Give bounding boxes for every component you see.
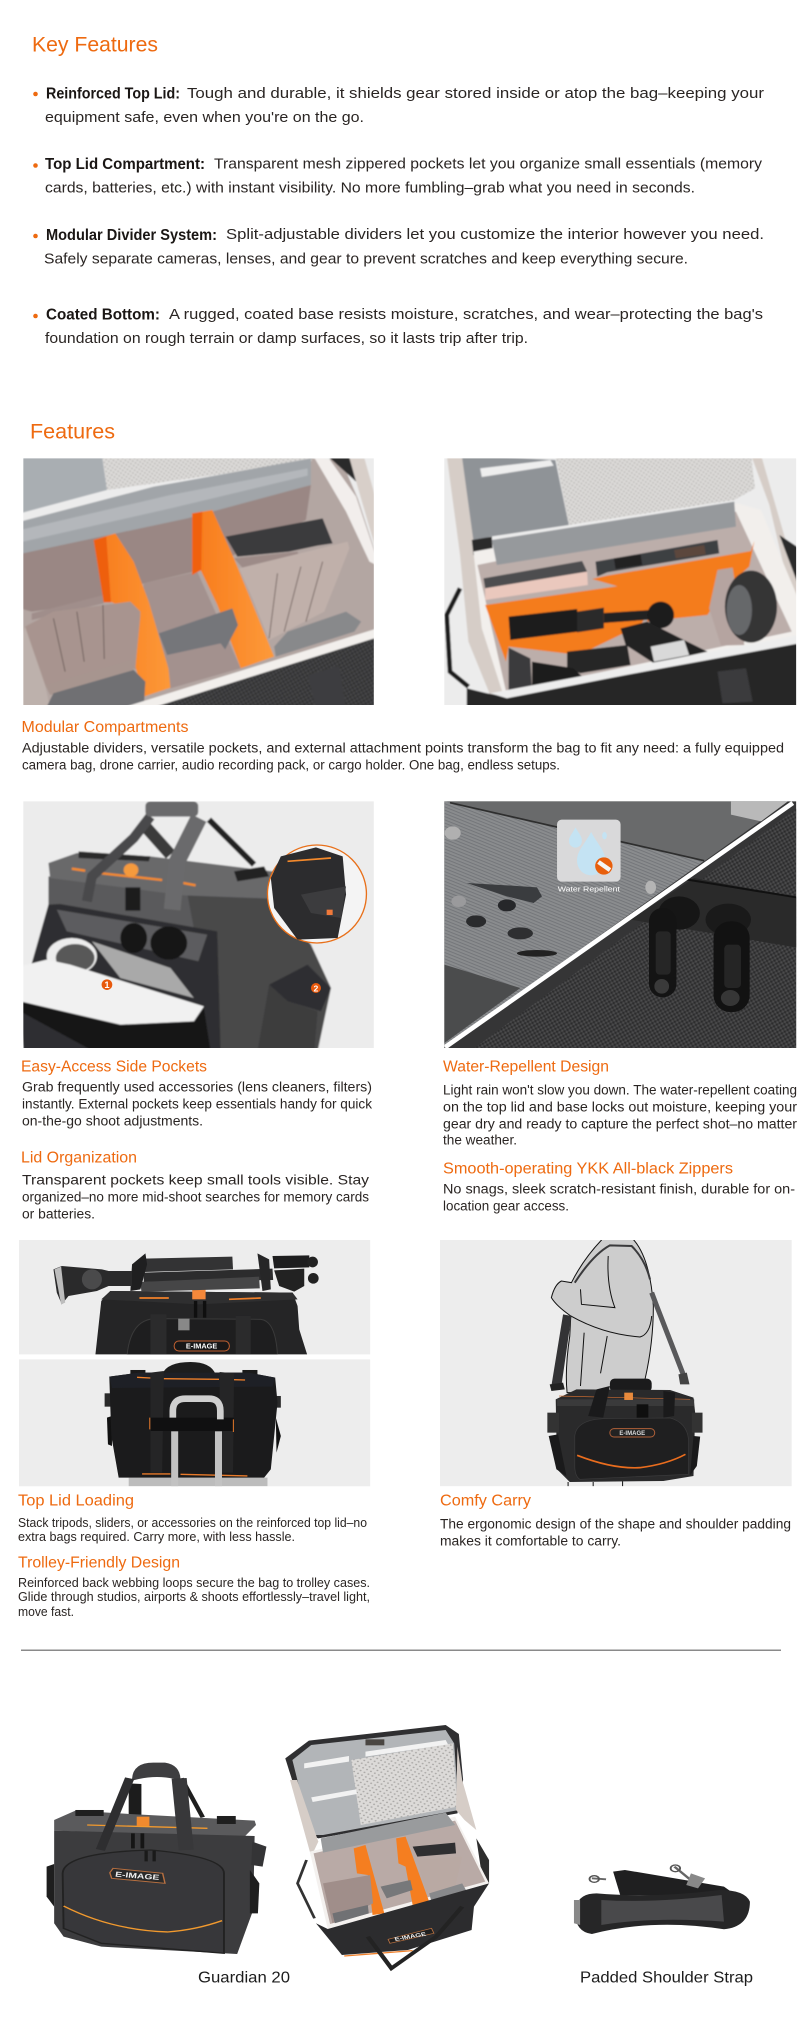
icon: zipper pulls (649, 896, 751, 1012)
text block: water-repellent description: on the top lid and base locks out moisture, keeping your (443, 1100, 798, 1114)
item: Coated Bottom: Coated Bottom: (46, 306, 160, 324)
subheading: Comfy Carry: Comfy Carry (440, 1492, 531, 1510)
text block: top lid loading description (18, 1516, 367, 1544)
item: Reinforced Top Lid (33, 85, 764, 126)
subheading: Lid Organization: Lid Organization (21, 1150, 137, 1166)
heading: Features: Features (30, 420, 115, 444)
text block: Modular Compartments description (22, 740, 784, 772)
photo: tripod on top lid (19, 1240, 370, 1354)
text block: lid organization description: Transparent pockets keep small tools visible. Stay (22, 1172, 369, 1188)
text block: zippers description (443, 1182, 795, 1214)
logo: E-IMAGE: E-IMAGE (394, 1931, 428, 1943)
item: Modular Divider System: Split-adjustable dividers let you customize the interior however you need. (226, 226, 764, 243)
text block: lid organization description: or batteries. (22, 1206, 95, 1222)
product photo: Guardian 20 open interior view (285, 1725, 489, 1968)
logo: E-IMAGE (174, 1341, 229, 1351)
photo: bag on trolley handle (15, 1356, 376, 1489)
item: Top Lid Compartment: Transparent mesh zippered pockets let you organize small essentials (memory (214, 156, 763, 172)
text block: trolley-friendly description (18, 1576, 370, 1619)
text block: zippers description: location gear access. (443, 1198, 569, 1214)
photo: packed compartments with camera gear (440, 455, 800, 708)
item: Modular Divider System (33, 226, 764, 268)
logo: E-IMAGE: E-IMAGE (115, 1870, 160, 1882)
item: Top Lid Compartment (33, 156, 763, 196)
item: Reinforced Top Lid: equipment safe, even when you're on the go. (45, 109, 364, 126)
text block: side pockets description: Grab frequently used accessories (lens cleaners, filters) (22, 1080, 372, 1094)
text block: trolley-friendly description: Reinforced back webbing loops secure the bag to trolley cases. (18, 1576, 370, 1590)
heading: Key Features: Key Features (32, 34, 158, 56)
item: Modular Divider System: Modular Divider System: (46, 227, 217, 244)
item: Top Lid Compartment: Top Lid Compartment: (45, 156, 205, 173)
subheading: Water-Repellent Design: Water-Repellent Design (443, 1058, 609, 1076)
text block: side pockets description: on-the-go shoot adjustments. (22, 1114, 203, 1128)
text block: water-repellent description (443, 1082, 798, 1148)
text block: comfy carry description: The ergonomic design of the shape and shoulder padding (440, 1516, 791, 1532)
logo: E-IMAGE: E-IMAGE (619, 1431, 645, 1437)
text block: water-repellent description: Light rain won't slow you down. The water-repellent coating (443, 1082, 797, 1098)
item: Top Lid Compartment: cards, batteries, etc.) with instant visibility. No more fumbling–grab what you need in seconds. (45, 180, 695, 196)
item: Coated Bottom (33, 306, 763, 347)
item: Modular Divider System: Safely separate cameras, lenses, and gear to prevent scratches and keep everything secure. (44, 250, 688, 268)
text block: lid organization description (22, 1172, 369, 1222)
text block: Modular Compartments description: camera bag, drone carrier, audio recording pack, or cargo holder. One bag, endless setups. (22, 758, 560, 772)
text block: top lid loading description: extra bags required. Carry more, with less hassle. (18, 1530, 295, 1544)
text block: water-repellent description: the weather. (443, 1132, 517, 1148)
photo: empty compartments with orange dividers (20, 455, 381, 708)
subheading: Trolley-Friendly Design: Trolley-Friendly Design (18, 1554, 180, 1572)
subheading: Modular Compartments: Modular Compartments (22, 719, 189, 736)
item: Reinforced Top Lid: Tough and durable, it shields gear stored inside or atop the bag–keeping your (187, 85, 764, 102)
item: Coated Bottom: A rugged, coated base resists moisture, scratches, and wear–protecting the bag's (169, 306, 763, 323)
icon: water-repellent badge (557, 820, 621, 882)
logo: E-IMAGE (388, 1928, 434, 1943)
subheading: Smooth-operating YKK All-black Zippers: Smooth-operating YKK All-black Zippers (443, 1160, 733, 1178)
logo: E-IMAGE (110, 1868, 165, 1883)
label: Water Repellent: Water Repellent (558, 885, 620, 894)
text block: side pockets description: instantly. External pockets keep essentials handy for quick (22, 1096, 372, 1112)
photo: water-repellent fabric and YKK zippers split diagonally (440, 798, 800, 1051)
text block: Modular Compartments description: Adjustable dividers, versatile pockets, and external attachment points transform the bag to fit any need: a fully equipped (22, 740, 784, 756)
text block: zippers description: No snags, sleek scratch-resistant finish, durable for on- (443, 1182, 795, 1196)
item: Reinforced Top Lid: Reinforced Top Lid: (46, 86, 180, 102)
text block: lid organization description: organized–no more mid-shoot searches for memory cards (22, 1190, 369, 1204)
photo: easy-access side pockets with callout circle: 2 (314, 983, 319, 993)
text block: comfy carry description: makes it comfortable to carry. (440, 1534, 621, 1548)
feature list: key features (33, 85, 764, 347)
text block: side pockets description (22, 1080, 372, 1128)
photo: easy-access side pockets with callout circle (20, 798, 381, 1051)
caption: Padded Shoulder Strap: Padded Shoulder Strap (580, 1970, 753, 1986)
subheading: Top Lid Loading: Top Lid Loading (18, 1492, 134, 1510)
text block: top lid loading description: Stack tripods, sliders, or accessories on the reinforced top lid–no (18, 1516, 367, 1530)
logo: E-IMAGE (610, 1429, 655, 1437)
caption: Guardian 20: Guardian 20 (198, 1970, 290, 1986)
product photo: Guardian 20 closed front view (47, 1763, 266, 1954)
tripod (53, 1253, 319, 1304)
text block: comfy carry description (440, 1516, 791, 1548)
subheading: Easy-Access Side Pockets: Easy-Access Side Pockets (21, 1058, 207, 1076)
illustration: person carrying the bag on shoulder strap (440, 1238, 792, 1486)
product photo: padded shoulder strap (574, 1865, 750, 1934)
text block: trolley-friendly description: Glide through studios, airports & shoots effortlessly–travel light, (18, 1590, 370, 1604)
photo: easy-access side pockets with callout circle: 1 (104, 980, 110, 990)
text block: trolley-friendly description: move fast. (18, 1605, 74, 1619)
logo: E-IMAGE: E-IMAGE (186, 1341, 217, 1350)
item: Coated Bottom: foundation on rough terrain or damp surfaces, so it lasts trip after trip. (45, 330, 528, 347)
text block: water-repellent description: gear dry and ready to capture the perfect shot–no matter (443, 1116, 798, 1132)
